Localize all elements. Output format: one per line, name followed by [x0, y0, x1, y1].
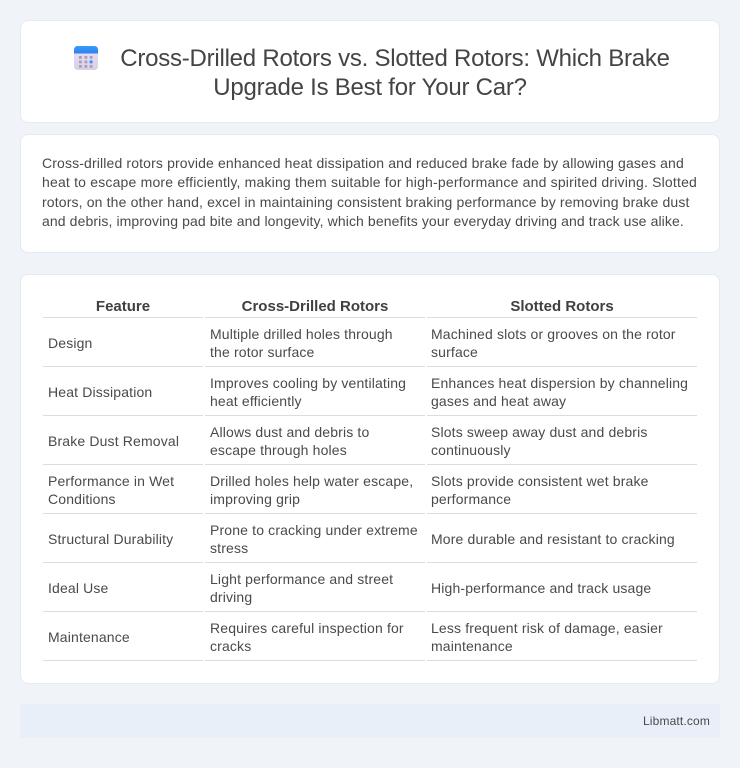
- text: Machined slots or grooves on the rotor: [431, 326, 676, 342]
- text: Requires careful inspection for: [210, 620, 404, 636]
- text: Slots provide consistent wet brake: [431, 473, 649, 489]
- row: Brake Dust Removal: [43, 424, 697, 465]
- row: Performance in Wet Conditions: [43, 473, 697, 514]
- text: Ideal Use: [48, 580, 108, 596]
- text: Design: [48, 335, 92, 351]
- text: Cross-Drilled Rotors: [242, 298, 388, 315]
- panel: comparison table: [20, 274, 720, 684]
- text: Maintenance: [48, 629, 130, 645]
- panel: title card: [20, 20, 720, 123]
- panel: intro text: and debris, improving pad bite and longevity, which benefits your everyday driving and track use alike.: [42, 213, 684, 229]
- row: Design: [43, 326, 697, 367]
- text: Conditions: [48, 491, 116, 507]
- text: Prone to cracking under extreme: [210, 522, 418, 538]
- text: Less frequent risk of damage, easier: [431, 620, 663, 636]
- row: Ideal Use: [43, 571, 697, 612]
- text: performance: [431, 491, 511, 507]
- panel: intro text: heat to escape more efficiently, making them suitable for high-performance and spirited driving. Slotted: [42, 174, 697, 190]
- title: Upgrade Is Best for Your Car?: [213, 74, 527, 101]
- text: escape through holes: [210, 442, 347, 458]
- text: Brake Dust Removal: [48, 433, 179, 449]
- table header: [43, 298, 697, 318]
- text: Slotted Rotors: [510, 298, 614, 315]
- text: Feature: [96, 298, 150, 315]
- row: Maintenance: [43, 620, 697, 661]
- panel: intro text: Cross-drilled rotors provide enhanced heat dissipation and reduced brake fade by allowing gases and: [42, 155, 684, 171]
- text: maintenance: [431, 638, 513, 654]
- row: Structural Durability: [43, 522, 697, 563]
- text: Enhances heat dispersion by channeling: [431, 375, 688, 391]
- text: Light performance and street: [210, 571, 393, 587]
- title: [120, 45, 670, 101]
- text: Heat Dissipation: [48, 384, 152, 400]
- text: Improves cooling by ventilating: [210, 375, 406, 391]
- row: Heat Dissipation: [43, 375, 697, 416]
- panel: intro text: rotors, on the other hand, excel in maintaining consistent braking performance by removing brake dust: [42, 194, 690, 210]
- text: Allows dust and debris to: [210, 424, 369, 440]
- text: Drilled holes help water escape,: [210, 473, 413, 489]
- text: More durable and resistant to cracking: [431, 531, 675, 547]
- text: High-performance and track usage: [431, 580, 651, 596]
- text: gases and heat away: [431, 393, 566, 409]
- panel: intro text: [20, 134, 720, 253]
- footer: [20, 704, 720, 738]
- text: the rotor surface: [210, 344, 314, 360]
- text: Performance in Wet: [48, 473, 174, 489]
- title: Cross-Drilled Rotors vs. Slotted Rotors: Which Brake: [120, 45, 670, 72]
- text: cracks: [210, 638, 251, 654]
- text: Slots sweep away dust and debris: [431, 424, 647, 440]
- text: continuously: [431, 442, 511, 458]
- footer text: Libmatt.com: [643, 714, 710, 728]
- text: surface: [431, 344, 478, 360]
- text: Multiple drilled holes through: [210, 326, 393, 342]
- icon: calendar: [74, 46, 98, 70]
- text: driving: [210, 589, 252, 605]
- text: improving grip: [210, 491, 300, 507]
- text: Structural Durability: [48, 531, 173, 547]
- text: heat efficiently: [210, 393, 302, 409]
- text: stress: [210, 540, 248, 556]
